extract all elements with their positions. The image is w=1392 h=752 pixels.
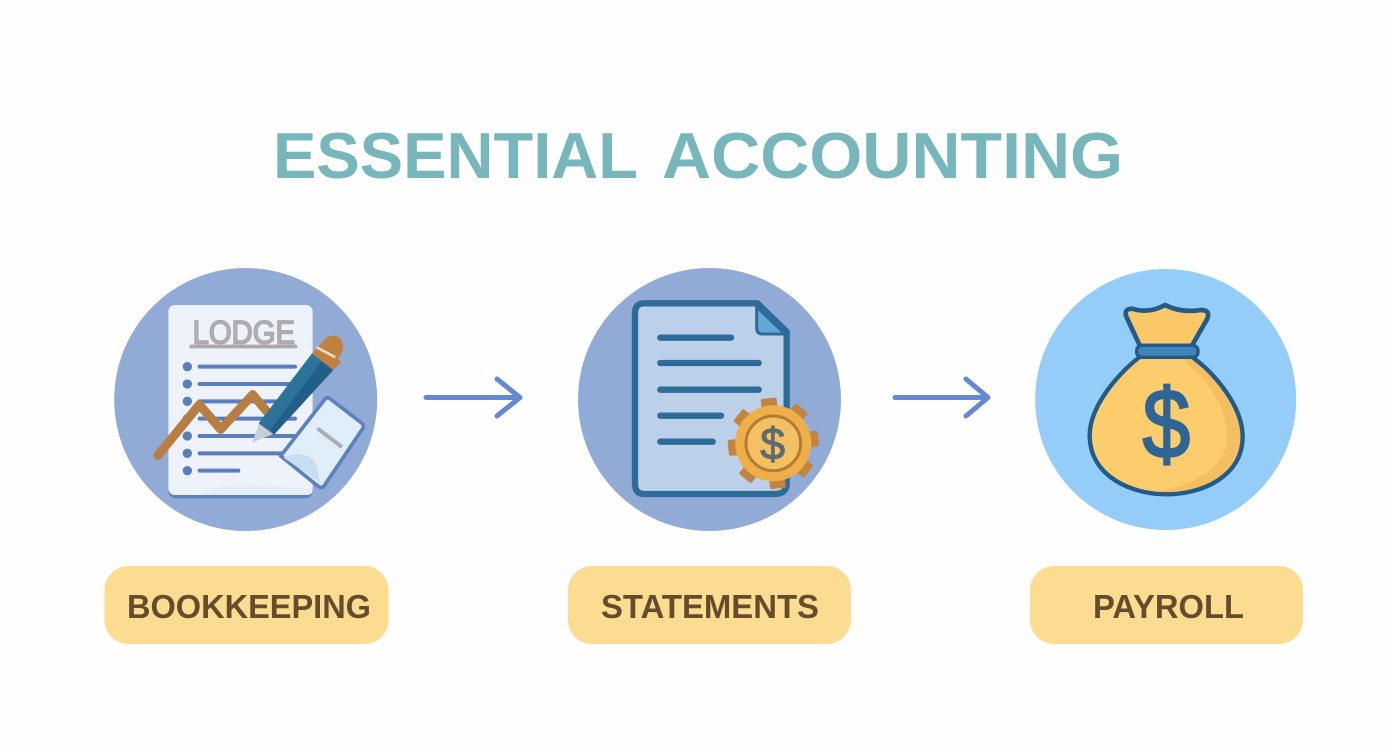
- title: ESSENTIAL: [273, 119, 638, 192]
- pencil: [252, 336, 343, 443]
- label: statements: STATEMENTS: [601, 588, 819, 625]
- bag tie: [1137, 345, 1198, 357]
- page fold: [757, 307, 785, 334]
- icon: financial statement: [578, 268, 841, 531]
- label: bookkeeping: [104, 566, 388, 644]
- ledger rows: [183, 362, 297, 475]
- icon: money bag: [1035, 269, 1296, 530]
- label: payroll: PAYROLL: [1093, 588, 1244, 625]
- bag top: [1126, 305, 1208, 346]
- title: [273, 119, 1123, 192]
- chart line: [158, 395, 271, 455]
- label: statements: [568, 566, 851, 644]
- bag body: [1090, 357, 1243, 494]
- eraser: [281, 398, 364, 488]
- gear with dollar: $: [760, 420, 785, 469]
- dollar sign: $: [1142, 368, 1190, 479]
- ledger heading: LODGE: [193, 314, 295, 350]
- icon: bookkeeping ledger: [114, 268, 377, 531]
- gear with dollar: [724, 394, 823, 493]
- label: bookkeeping: BOOKKEEPING: [127, 588, 371, 625]
- heading underline: [189, 345, 297, 348]
- text lines: [660, 338, 759, 442]
- title: ACCOUNTING: [662, 119, 1123, 192]
- arrow: statements to payroll: [895, 379, 988, 416]
- label: payroll: [1030, 566, 1303, 644]
- ledger page: [168, 305, 313, 498]
- document: [635, 303, 787, 494]
- arrow: bookkeeping to statements: [426, 379, 520, 416]
